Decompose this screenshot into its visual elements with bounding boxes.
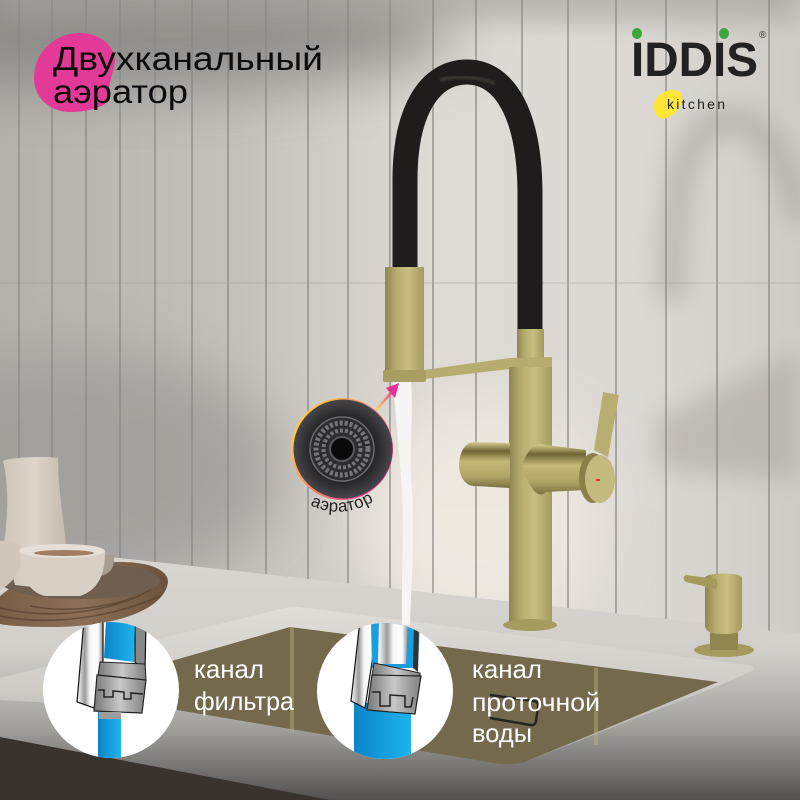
dispenser neck bbox=[710, 630, 738, 650]
left cold handle bbox=[459, 442, 510, 488]
sink interior bbox=[168, 627, 718, 764]
hose highlight bbox=[440, 77, 495, 84]
yellow blob bbox=[654, 90, 682, 119]
aerator callout bbox=[291, 383, 399, 515]
countertop bbox=[0, 545, 800, 800]
dispenser pump bbox=[684, 575, 718, 589]
left channel circle bbox=[43, 620, 179, 762]
right channel label: проточной bbox=[472, 687, 600, 717]
sink drain grille bbox=[490, 695, 538, 725]
right circle background bbox=[317, 623, 453, 759]
tray bbox=[0, 562, 168, 627]
right channel label: воды bbox=[472, 718, 532, 748]
handle disc bbox=[579, 453, 615, 503]
aerator ring bbox=[291, 398, 393, 500]
right arm bbox=[523, 444, 586, 495]
right channel label: канал bbox=[472, 654, 542, 684]
small bowl behind bbox=[100, 555, 114, 576]
aerator mesh bbox=[310, 417, 374, 481]
left circle background bbox=[43, 622, 179, 758]
lever handle bbox=[594, 392, 619, 457]
head flange bbox=[383, 370, 426, 382]
body column bbox=[509, 367, 552, 622]
title blob bbox=[34, 33, 115, 112]
tray with tableware bbox=[0, 457, 168, 627]
faucet collar bbox=[517, 329, 544, 361]
title: Двухканальный bbox=[53, 40, 323, 77]
logo IDDIS kitchen bbox=[631, 28, 767, 119]
dispenser body bbox=[705, 574, 742, 634]
water stream bbox=[393, 381, 413, 625]
sink rim bbox=[0, 607, 754, 762]
aerator disc bbox=[294, 400, 392, 498]
left channel label: фильтра bbox=[194, 686, 295, 716]
swivel bar bbox=[424, 357, 552, 379]
left channel illustration bbox=[77, 620, 146, 762]
arrow to aerator bbox=[376, 383, 399, 410]
main bowl bbox=[19, 544, 105, 596]
right channel circle bbox=[317, 620, 453, 763]
right channel illustration bbox=[351, 620, 421, 763]
base bbox=[503, 619, 557, 631]
pull-out head bbox=[385, 267, 424, 371]
soap dispenser bbox=[684, 574, 754, 657]
left channel label: канал bbox=[194, 654, 264, 684]
kitchen label: kitchen bbox=[667, 96, 725, 112]
black flexible hose bbox=[405, 72, 530, 332]
faucet bbox=[383, 72, 619, 631]
logo green dots bbox=[632, 28, 729, 39]
registered mark: ® bbox=[759, 30, 767, 41]
sink reflection line bbox=[292, 627, 596, 745]
jug bbox=[3, 457, 66, 590]
aerator label: аэратор bbox=[311, 494, 372, 515]
logo wordmark: IDDIS bbox=[631, 34, 758, 87]
counter front dark edge bbox=[0, 737, 330, 800]
dispenser base bbox=[694, 643, 754, 657]
title: аэратор bbox=[53, 73, 188, 110]
left bowl bbox=[0, 541, 22, 590]
